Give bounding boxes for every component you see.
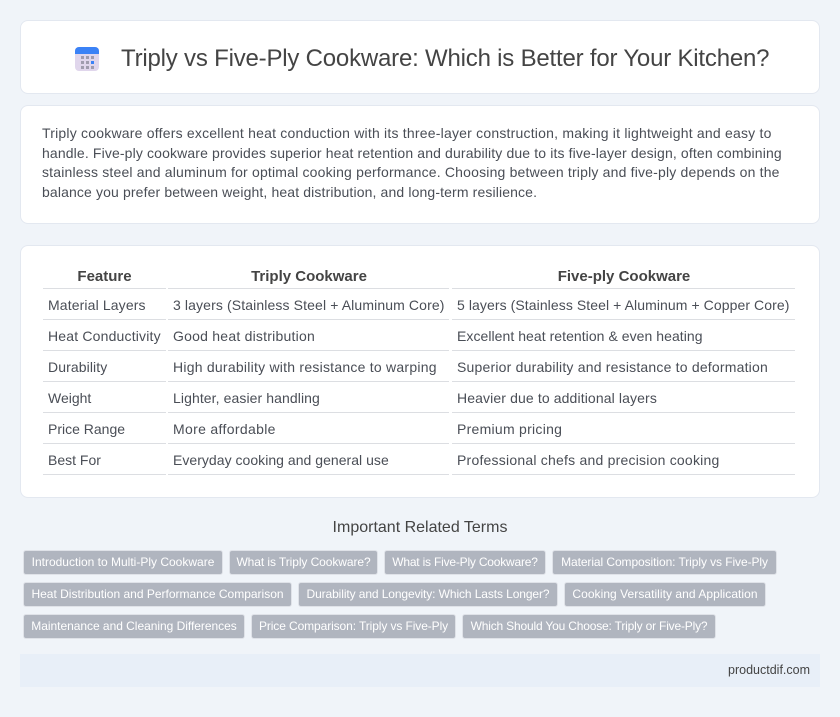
text block: introduction [42,125,782,200]
related term tags [23,550,777,639]
panel: comparison table: Heavier due to additional layers [457,390,657,406]
icon: calendar [75,47,99,71]
tag: Which Should You Choose: Triply or Five-Ply? [471,619,707,633]
panel: comparison table: Superior durability and resistance to deformation [457,359,768,375]
tag [552,550,777,575]
panel: comparison table: Premium pricing [457,421,562,437]
tag [23,614,245,639]
tag [251,614,456,639]
panel: comparison table: Lighter, easier handling [173,390,320,406]
footer bar [20,654,820,687]
tag: Heat Distribution and Performance Comparison [31,587,284,601]
panel: comparison table: Good heat distribution [173,328,315,344]
text block: introduction: Triply cookware offers excellent heat conduction with its three-layer construction, making it lightweight and easy to [42,125,772,141]
footer source: productdif.com [728,663,810,677]
table header: Feature [77,268,132,285]
panel: comparison table: More affordable [173,421,276,437]
panel: intro text [20,105,820,224]
row: best for: Best For [48,452,101,468]
text block: introduction: balance you prefer between weight, heat distribution, and long-term resilience. [42,184,537,200]
tag: Cooking Versatility and Application [572,587,758,601]
heading: related terms: Important Related Terms [333,519,507,536]
tag: Maintenance and Cleaning Differences [31,619,237,633]
tag [23,582,292,607]
tag: What is Triply Cookware? [236,555,371,569]
tag [23,550,223,575]
tag [384,550,546,575]
panel: comparison table [20,245,820,498]
row: material layers: Material Layers [48,297,146,313]
tag [229,550,378,575]
row: price range: Price Range [48,421,125,437]
panel: comparison table: Excellent heat retention & even heating [457,328,703,344]
text block: introduction: handle. Five-ply cookware provides superior heat retention and durability due to its five-layer design, often combining [42,145,782,161]
tag [462,614,716,639]
row: durability: Durability [48,359,107,375]
tag [564,582,766,607]
tag: Material Composition: Triply vs Five-Ply [561,555,768,569]
table header [77,268,690,285]
tag: Introduction to Multi-Ply Cookware [32,555,214,569]
title: Triply vs Five-Ply Cookware: Which is Better for Your Kitchen? [121,45,769,72]
panel: comparison table: 3 layers (Stainless Steel + Aluminum Core) [173,297,445,313]
panel: comparison table: 5 layers (Stainless Steel + Aluminum + Copper Core) [457,297,789,313]
table header: Five-ply Cookware [558,268,690,285]
tag: Durability and Longevity: Which Lasts Longer? [306,587,549,601]
panel: comparison table: Everyday cooking and general use [173,452,389,468]
panel: comparison table: High durability with resistance to warping [173,359,437,375]
text block: introduction: stainless steel and aluminum for optimal cooking performance. Choosing between triply and five-ply depends on the [42,164,780,180]
tag: What is Five-Ply Cookware? [392,555,538,569]
panel: comparison table: Professional chefs and precision cooking [457,452,720,468]
row: heat conductivity: Heat Conductivity [48,328,161,344]
tag [298,582,558,607]
tag: Price Comparison: Triply vs Five-Ply [259,619,448,633]
table header: Triply Cookware [251,268,367,285]
panel: title card [20,20,820,94]
row: weight: Weight [48,390,91,406]
